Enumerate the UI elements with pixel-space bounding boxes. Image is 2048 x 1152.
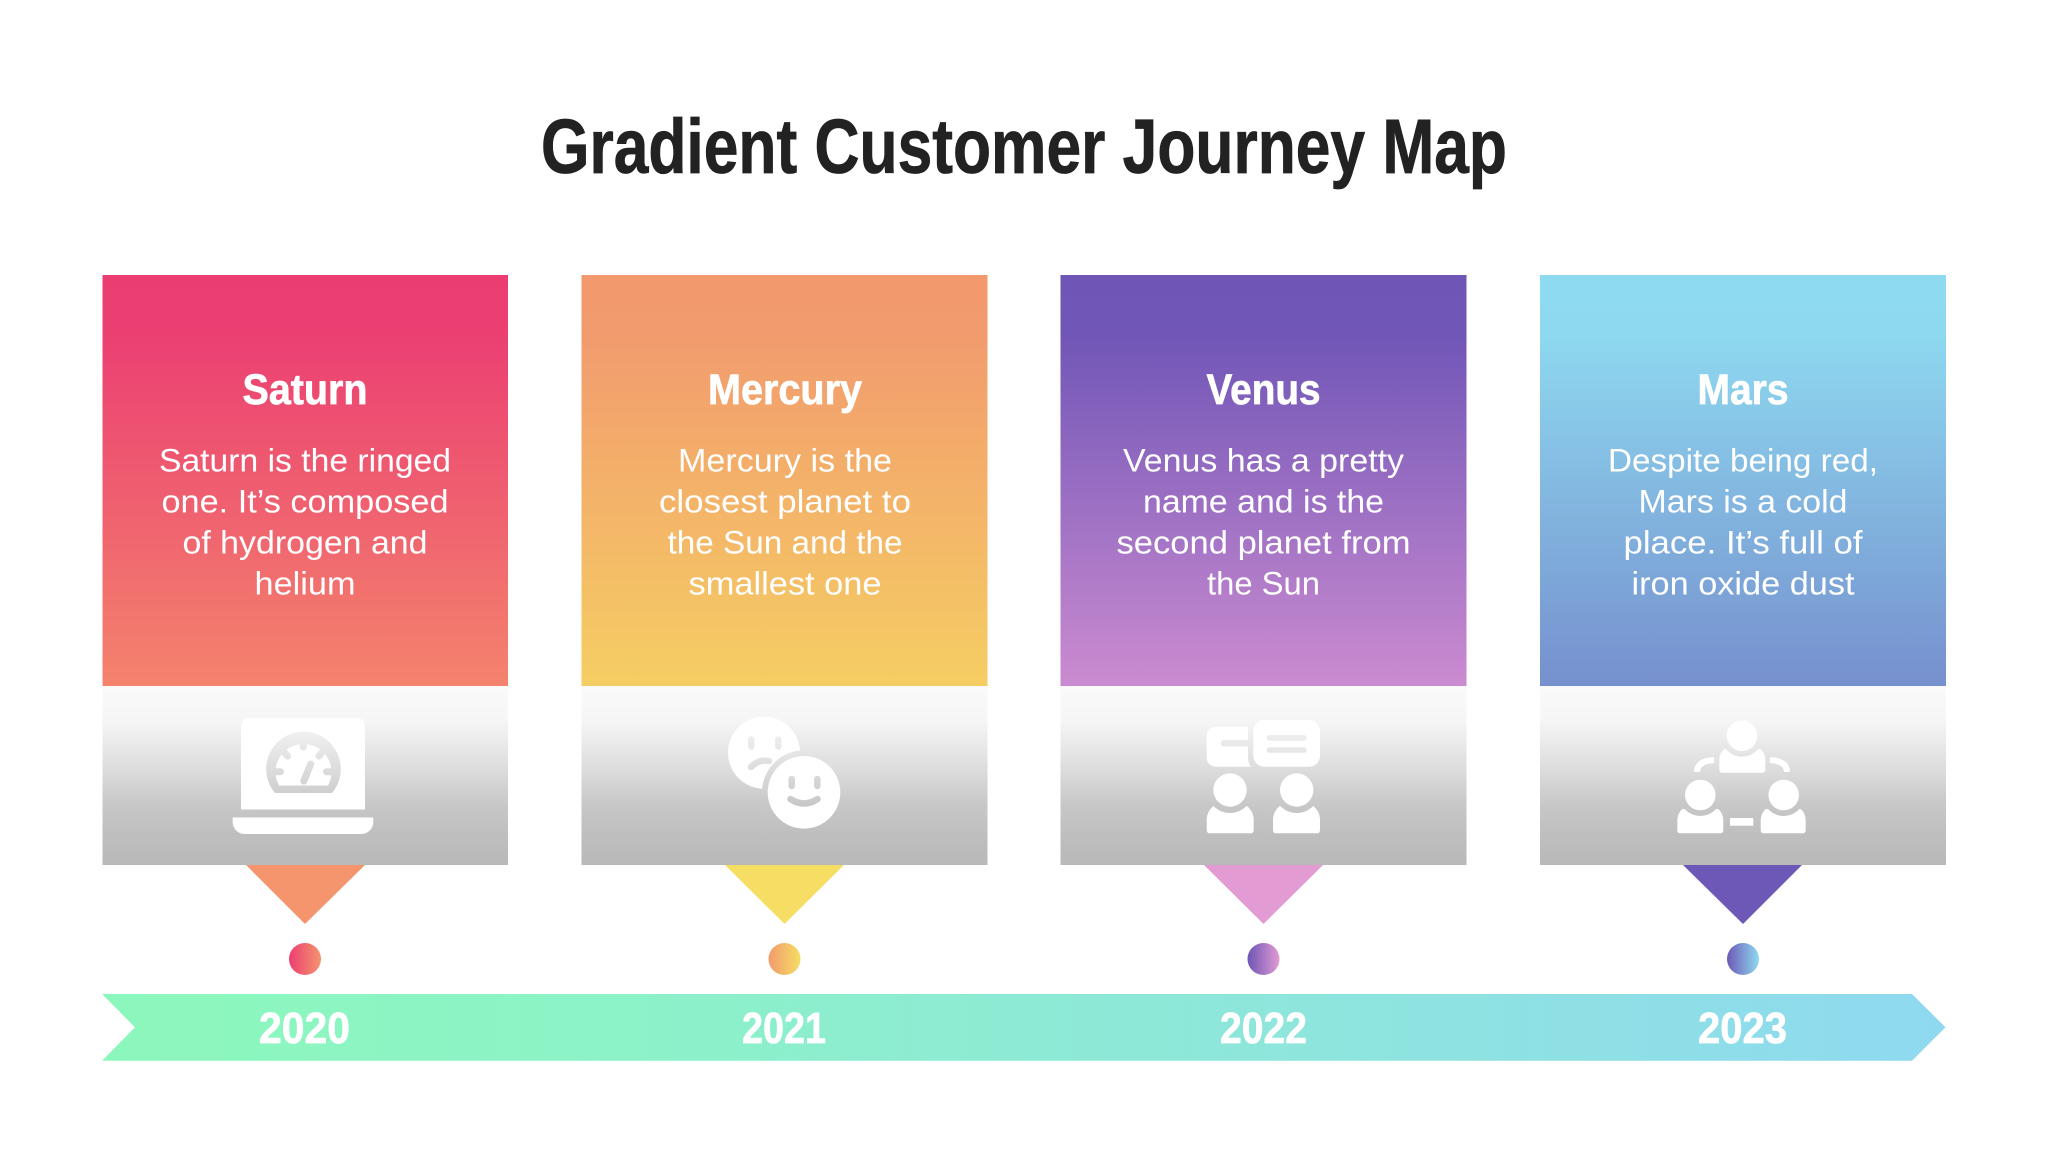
Mars description: place. It’s full of [1624, 524, 1863, 560]
arrow band [102, 994, 1946, 1061]
panel: Mars 2023 [1540, 275, 1946, 975]
Saturn description: helium [254, 566, 356, 602]
Saturn gradient card [102, 275, 508, 686]
year 2020: 2020 [259, 1004, 350, 1053]
Mars description: iron oxide dust [1632, 566, 1855, 602]
Mars description: Mars is a cold [1638, 484, 1848, 520]
icon: laptop with gauge [232, 718, 374, 834]
Mars description [1608, 442, 1878, 602]
Mars timeline dot [1727, 943, 1759, 975]
panel: Saturn 2020 [102, 275, 508, 975]
Venus description: the Sun [1207, 566, 1320, 602]
Mercury gradient card [582, 275, 988, 686]
Venus description: second planet from [1116, 524, 1410, 560]
Venus description [1116, 442, 1410, 602]
Mercury timeline dot [768, 943, 800, 975]
Mercury grey icon band [582, 686, 988, 865]
Mercury description: Mercury is the [678, 442, 892, 478]
Venus description: Venus has a pretty [1123, 442, 1404, 478]
Saturn timeline dot [289, 943, 321, 975]
Mercury description: smallest one [688, 566, 882, 602]
year 2023: 2023 [1698, 1004, 1787, 1053]
Mercury heading: Mercury [708, 366, 862, 414]
Mars description: Despite being red, [1608, 442, 1878, 478]
Venus grey icon band [1060, 686, 1466, 865]
Mars grey icon band [1540, 686, 1946, 865]
icon: sad and happy faces [728, 717, 840, 829]
Saturn heading: Saturn [242, 366, 368, 414]
Mercury description [659, 442, 911, 602]
Mars heading: Mars [1698, 366, 1788, 414]
Saturn description: of hydrogen and [182, 524, 428, 560]
panel: Mercury 2021 [582, 275, 988, 975]
title: Gradient Customer Journey Map [541, 104, 1507, 190]
Mercury description: the Sun and the [668, 524, 902, 560]
Venus gradient card [1060, 275, 1466, 686]
Saturn pointer triangle [246, 865, 365, 924]
Mercury pointer triangle [725, 865, 844, 924]
Saturn grey icon band [102, 686, 508, 865]
Mars pointer triangle [1683, 865, 1802, 924]
Saturn description: Saturn is the ringed [159, 442, 451, 478]
Venus heading: Venus [1206, 366, 1320, 414]
Venus timeline dot [1248, 943, 1280, 975]
year 2022: 2022 [1220, 1004, 1307, 1053]
icon: three people cycle [1677, 720, 1806, 834]
Saturn description [159, 442, 451, 602]
panel: Venus 2022 [1060, 275, 1466, 975]
Mercury description: closest planet to [659, 484, 911, 520]
Mars gradient card [1540, 275, 1946, 686]
Venus pointer triangle [1204, 865, 1323, 924]
Saturn description: one. It’s composed [162, 484, 448, 520]
year 2021: 2021 [742, 1004, 826, 1053]
icon: two people talking [1206, 720, 1320, 834]
Venus description: name and is the [1143, 484, 1384, 520]
timeline arrow [102, 994, 1946, 1061]
